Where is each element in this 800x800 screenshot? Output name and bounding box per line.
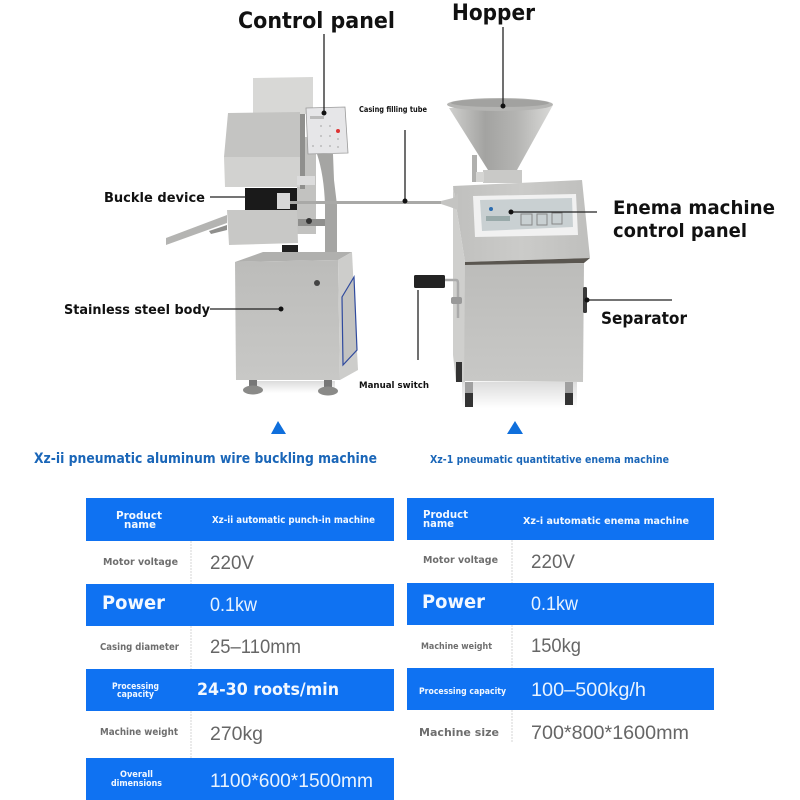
body knob (314, 280, 320, 286)
label: hopper: Hopper (452, 1, 535, 26)
row: power (407, 583, 714, 625)
row: power: Power (422, 591, 486, 613)
row: processing capacity (407, 668, 714, 710)
upper cover (224, 112, 305, 189)
row: power (86, 584, 394, 626)
line: separator (584, 298, 672, 302)
casing filling tube (290, 193, 458, 210)
label: enema machine control panel: control panel (613, 220, 747, 242)
row: product name (407, 498, 714, 540)
row: overall dimensions: 1100*600*1500mm (210, 770, 373, 792)
hopper (447, 98, 553, 170)
foot left (243, 380, 263, 394)
line: stainless steel body (210, 306, 284, 312)
line: control panel (322, 34, 326, 116)
upper cabinet (453, 180, 590, 262)
row: product name: name (423, 517, 454, 530)
row: product name (86, 498, 394, 541)
label: enema machine control panel: Enema machine (613, 197, 775, 219)
label: control panel: Control panel (238, 9, 395, 34)
row: machine weight (421, 625, 581, 668)
row: processing capacity: Processing capacity (419, 687, 506, 697)
row: machine weight (100, 711, 263, 758)
foot right (318, 380, 338, 396)
row: motor voltage: 220V (531, 551, 575, 573)
label: casing filling tube: Casing filling tube (359, 105, 427, 114)
row: processing capacity (86, 669, 394, 711)
label: manual switch: Manual switch (359, 381, 429, 391)
row: machine weight: 270kg (210, 723, 263, 745)
row: processing capacity: capacity (117, 690, 154, 700)
row: product name: Product (116, 509, 162, 522)
rear frame (297, 137, 316, 234)
row: machine weight: Machine weight (421, 642, 493, 652)
row: processing capacity: 100–500kg/h (531, 679, 646, 701)
row: motor voltage: Motor voltage (423, 555, 498, 566)
icon: triangle left (271, 421, 286, 434)
row: processing capacity: 24-30 roots/min (197, 680, 339, 700)
arm joint (298, 218, 325, 226)
row: motor voltage: Motor voltage (103, 557, 178, 568)
lower cabinet (464, 263, 584, 382)
floor shadow (250, 381, 335, 393)
rear leg (456, 362, 462, 382)
row: motor voltage (423, 540, 575, 583)
pedestal (270, 245, 312, 257)
left side (453, 186, 465, 382)
row: motor voltage (103, 541, 254, 584)
lower cover (227, 210, 298, 245)
side door (342, 277, 357, 365)
control panel box (306, 107, 348, 154)
row: casing diameter (100, 626, 301, 669)
label: stainless steel body: Stainless steel body (64, 303, 211, 318)
machine: aluminum wire buckling machine (166, 77, 358, 396)
row: motor voltage: 220V (210, 552, 254, 574)
row: product name: name (124, 518, 156, 531)
row: machine size (419, 710, 689, 744)
row: processing capacity: Processing (112, 682, 159, 692)
row: machine weight: 150kg (531, 635, 581, 657)
callout lines (210, 27, 672, 360)
line: manual switch (417, 290, 419, 360)
rear housing (253, 77, 313, 114)
discharge tray (166, 215, 227, 245)
row: machine weight: Machine weight (100, 727, 178, 738)
subtitle: right machine: Xz-1 pneumatic quantitative enema machine (430, 453, 669, 466)
row: power: 0.1kw (531, 593, 579, 615)
row: power: Power (102, 592, 166, 614)
label: buckle device: Buckle device (104, 191, 205, 206)
row: power: 0.1kw (210, 594, 258, 616)
row: casing diameter: 25–110mm (210, 636, 301, 658)
leg right (565, 382, 573, 405)
neck and valve (472, 155, 522, 183)
row: product name: Xz-i automatic enema machine (523, 516, 689, 527)
row: machine size: Machine size (419, 726, 499, 739)
label: enema machine control panel (613, 197, 775, 242)
stainless steel body (235, 252, 358, 380)
line: hopper (500, 27, 506, 108)
row: product name: Product (423, 508, 468, 521)
manual switch handle (414, 275, 462, 318)
buckle mechanism (245, 176, 315, 211)
row: casing diameter: Casing diameter (100, 642, 179, 653)
leg left (465, 382, 473, 407)
line: casing filling tube (402, 130, 408, 204)
label: separator: Separator (601, 309, 688, 329)
row: product name: Xz-ii automatic punch-in machine (212, 515, 375, 526)
machine: quantitative enema machine (290, 98, 590, 408)
control label plate (473, 194, 578, 237)
row: machine size: 700*800*1600mm (531, 722, 689, 744)
line: buckle device (210, 196, 246, 198)
table: Xz-i specifications (407, 498, 714, 744)
table: Xz-ii specifications (86, 498, 394, 800)
floor shadow (462, 382, 577, 408)
line: enema control panel (508, 210, 597, 214)
row: overall dimensions: dimensions (111, 779, 162, 789)
subtitle: left machine: Xz-ii pneumatic aluminum wire buckling machine (34, 451, 377, 467)
icon: triangle right (507, 421, 523, 434)
support column (317, 154, 337, 257)
separator knob (583, 287, 587, 313)
cabinet band (465, 258, 590, 266)
row: overall dimensions (86, 758, 394, 800)
row: overall dimensions: Overall (120, 770, 153, 780)
